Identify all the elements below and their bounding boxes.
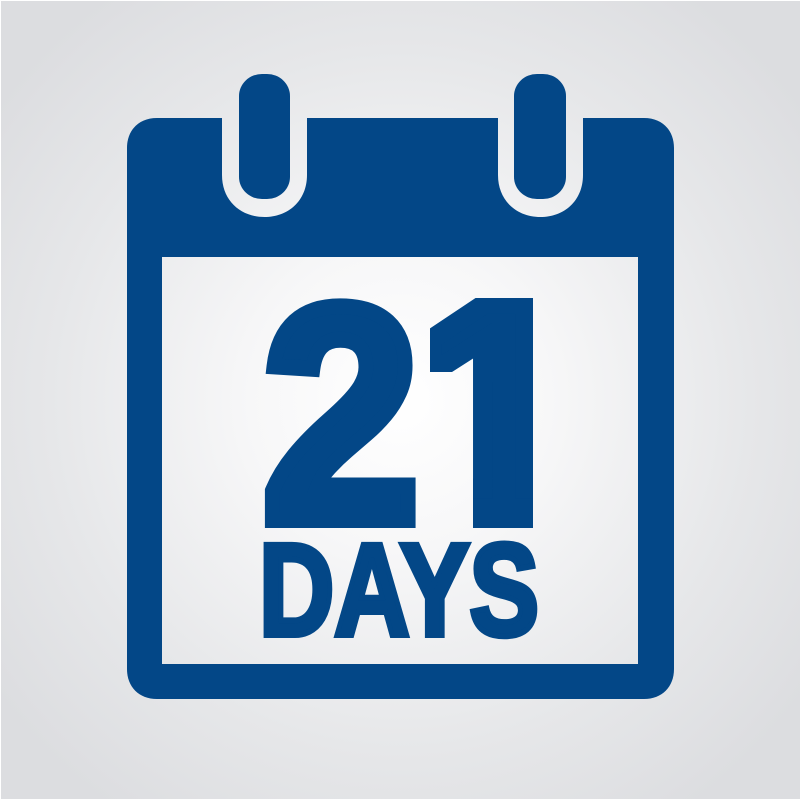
number: 21 xyxy=(264,298,533,528)
icon: calendar body xyxy=(127,118,674,699)
number: 21: 1 xyxy=(411,235,582,588)
label: DAYS: DAYS xyxy=(259,516,539,663)
number: 21: 2 xyxy=(262,243,420,585)
icon: left binder ring xyxy=(239,74,290,199)
icon: right binder ring xyxy=(514,74,566,199)
